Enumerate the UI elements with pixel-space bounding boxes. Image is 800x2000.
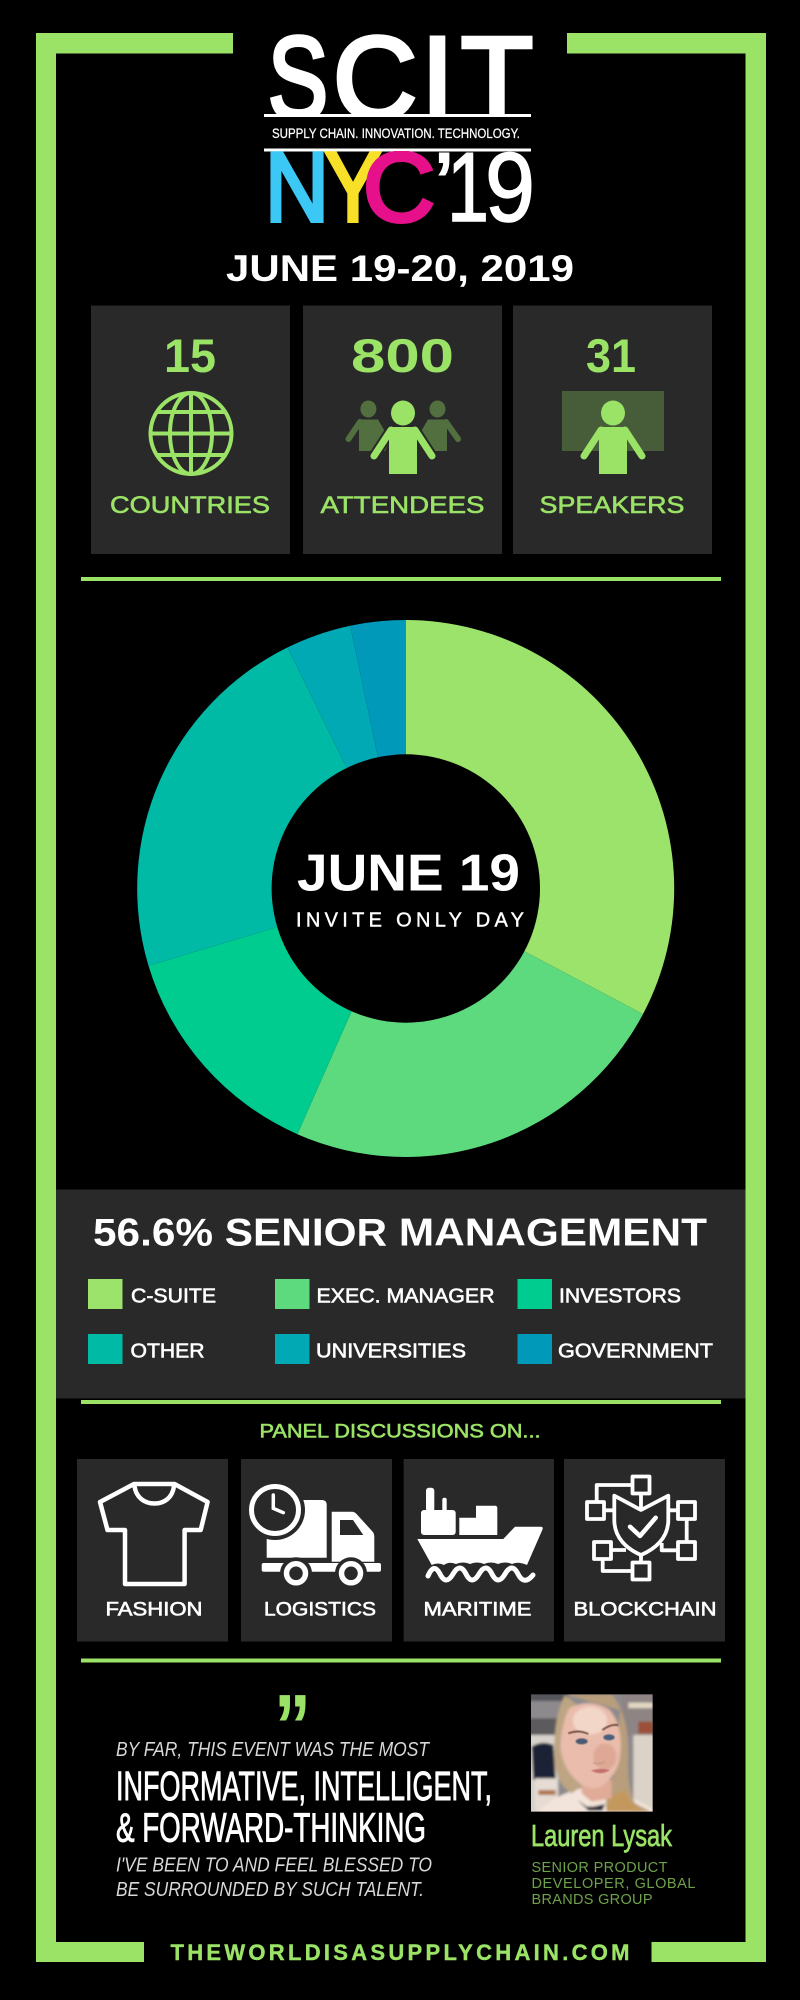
topic label: LOGISTICS (264, 1599, 376, 1620)
icon: speaker at screen (562, 391, 664, 474)
logo wordmark NYC 19 (270, 151, 532, 224)
stat card: attendees (303, 306, 502, 554)
logo wordmark NYC 19: C (363, 132, 435, 242)
stat label: SPEAKERS (540, 492, 684, 519)
icon: t-shirt (100, 1484, 208, 1584)
stat label: COUNTRIES (110, 492, 270, 519)
topic card: maritime (404, 1459, 554, 1642)
stat number 15: 15 (164, 329, 216, 382)
speaker portrait photo (528, 1692, 657, 1815)
segment: universities (288, 626, 406, 888)
legend: universities (275, 1334, 466, 1364)
speaker job title: SENIOR PRODUCT (532, 1860, 668, 1876)
legend: universities: UNIVERSITIES (316, 1341, 466, 1363)
testimonial quote (116, 1677, 492, 1901)
logo wordmark NYC 19: 9 (485, 132, 535, 242)
icon: globe (150, 393, 232, 474)
date heading: JUNE 19-20, 2019 (226, 248, 574, 289)
legend: exec. manager (275, 1279, 494, 1309)
quote line 2: I'VE BEEN TO AND FEEL BLESSED TO (116, 1855, 432, 1877)
speaker job title (532, 1860, 696, 1908)
panel: senior management legend (56, 1190, 746, 1398)
logo tagline: SUPPLY CHAIN. INNOVATION. TECHNOLOGY. (272, 126, 520, 141)
segment: c-suite (406, 620, 674, 1014)
logo wordmark SCIT: S (268, 13, 328, 145)
stat number 31: 31 (586, 329, 636, 382)
legend: government (518, 1334, 713, 1364)
topic label: BLOCKCHAIN (574, 1599, 716, 1620)
stat number 800: 800 (351, 329, 454, 382)
segment: investors (148, 888, 406, 1134)
legend: c-suite: C-SUITE (131, 1286, 216, 1308)
topic card: blockchain (564, 1459, 725, 1642)
donut centre subheading: INVITE ONLY DAY (296, 910, 524, 932)
stat label: ATTENDEES (320, 492, 484, 519)
legend: other (88, 1334, 204, 1364)
logo wordmark SCIT: I (421, 13, 454, 145)
logo: SCIT NYC '19 (264, 34, 533, 224)
logo wordmark SCIT: T (461, 13, 533, 145)
topic label: MARITIME (424, 1599, 532, 1620)
logo wordmark SCIT: C (333, 13, 417, 145)
legend: investors: INVESTORS (559, 1286, 681, 1308)
donut chart (137, 620, 674, 1157)
topic card: fashion (77, 1459, 228, 1642)
quote line 3: BE SURROUNDED BY SUCH TALENT. (116, 1879, 424, 1901)
stat card: countries (91, 306, 290, 554)
icon: blockchain shield (587, 1476, 695, 1580)
icon: cargo ship (417, 1488, 543, 1580)
legend: investors (518, 1279, 681, 1309)
panel discussions heading: PANEL DISCUSSIONS ON... (260, 1421, 540, 1442)
speaker name: Lauren Lysak (531, 1819, 673, 1853)
stat card: speakers (513, 306, 712, 554)
segment: other (137, 647, 406, 966)
logo wordmark NYC 19: 1 (447, 132, 489, 242)
topic card: logistics (241, 1459, 392, 1642)
logo wordmark NYC 19: Y (325, 132, 381, 242)
legend: c-suite (88, 1279, 216, 1309)
quote emphasis line 1: INFORMATIVE, INTELLIGENT, (116, 1763, 492, 1809)
speaker job title: DEVELOPER, GLOBAL (532, 1876, 696, 1892)
segment: government (350, 620, 406, 888)
topic label: FASHION (106, 1599, 202, 1620)
legend heading: 56.6% SENIOR MANAGEMENT (93, 1212, 708, 1254)
segment: exec. manager (297, 888, 643, 1157)
logo wordmark NYC 19: N (265, 132, 329, 242)
legend: other: OTHER (130, 1341, 204, 1363)
legend: exec. manager: EXEC. MANAGER (316, 1286, 494, 1308)
footer website: THEWORLDISASUPPLYCHAIN.COM (170, 1940, 630, 1965)
icon: group of people (348, 400, 458, 474)
logo wordmark SCIT (270, 34, 533, 114)
icon: delivery truck with clock (245, 1480, 381, 1589)
quote emphasis line 2: & FORWARD-THINKING (116, 1805, 426, 1851)
legend: government: GOVERNMENT (558, 1341, 713, 1363)
donut centre heading: JUNE 19 (297, 844, 520, 902)
quote line 1: BY FAR, THIS EVENT WAS THE MOST (116, 1739, 431, 1761)
icon: quotation mark: ” (274, 1677, 311, 1777)
logo wordmark NYC 19: ’ (433, 132, 455, 242)
speaker job title: BRANDS GROUP (532, 1892, 652, 1908)
